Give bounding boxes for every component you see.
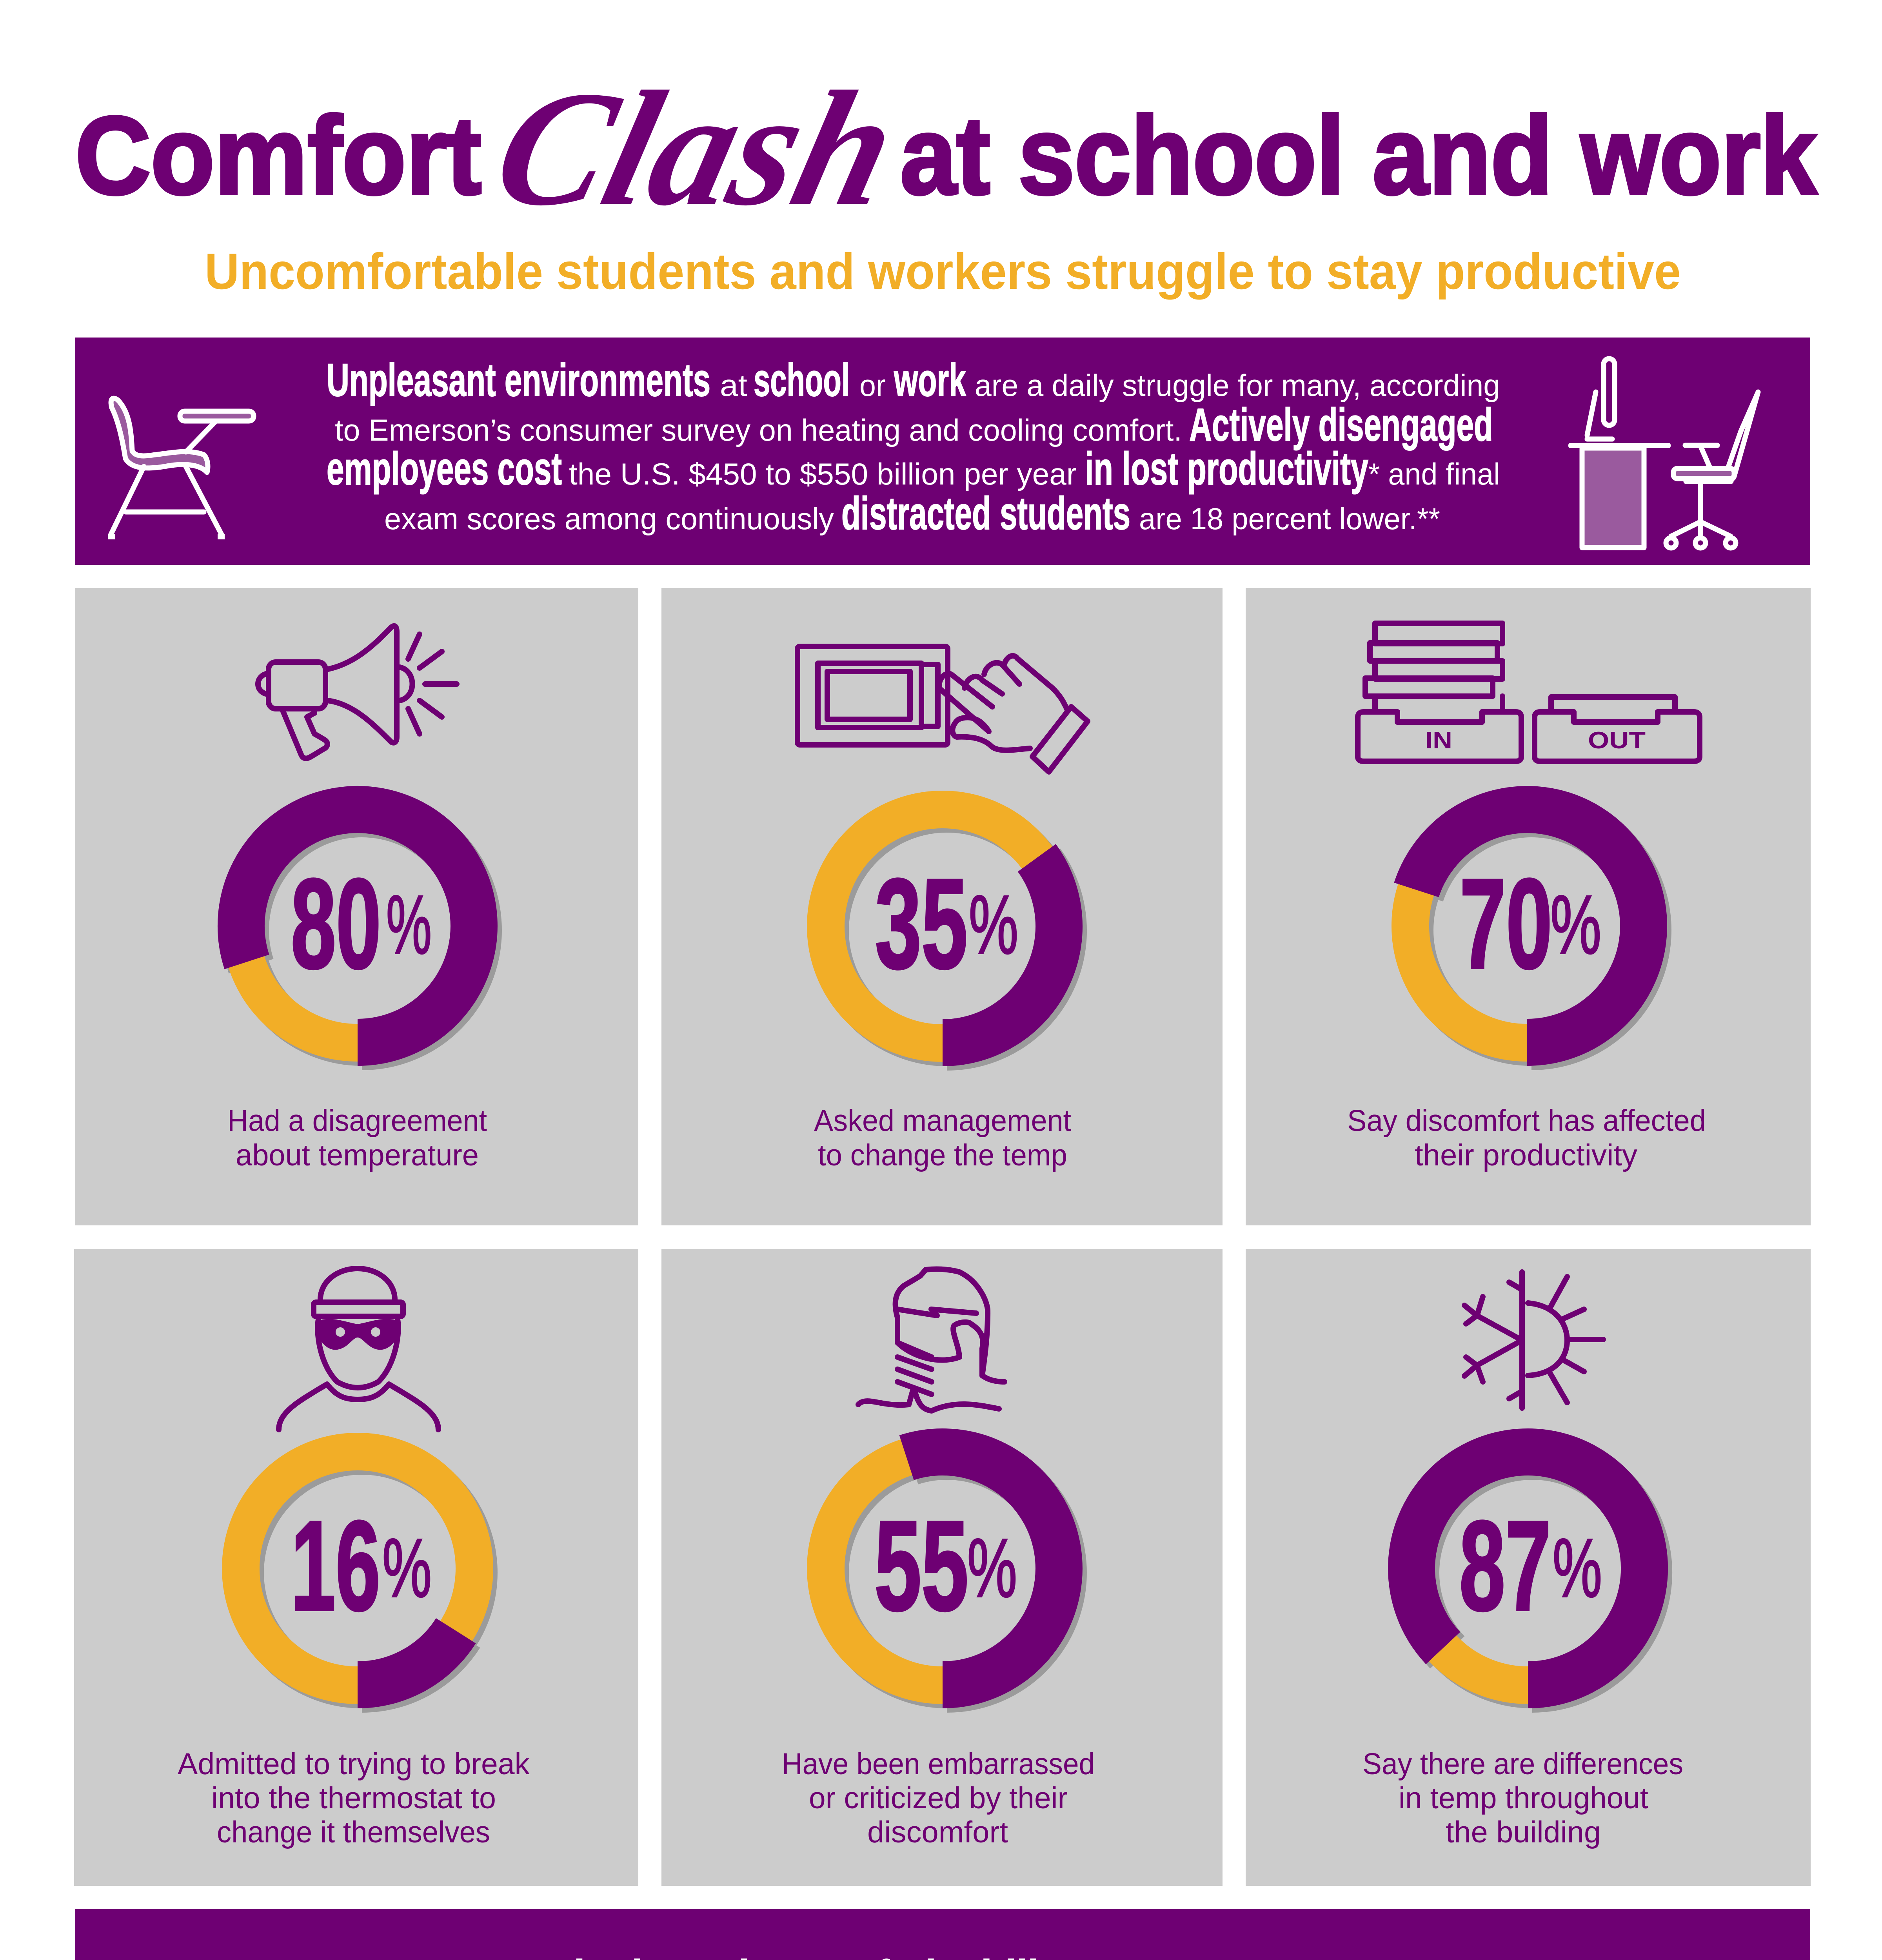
caption bbox=[227, 1104, 487, 1172]
caption: discomfort bbox=[867, 1815, 1008, 1849]
title bbox=[75, 58, 1818, 240]
caption: in temp throughout bbox=[1399, 1781, 1648, 1815]
caption bbox=[782, 1747, 1095, 1849]
caption: Admitted to trying to break bbox=[178, 1747, 530, 1781]
value: 55%: % bbox=[967, 1521, 1017, 1614]
intro text: in lost productivity bbox=[1085, 443, 1368, 495]
icon: office desk and chair bbox=[1568, 359, 1758, 548]
value: 80%: % bbox=[386, 878, 432, 971]
value: 80%: 80 bbox=[291, 853, 381, 995]
intro text: distracted students bbox=[841, 488, 1130, 539]
donut chart: 55% bbox=[826, 1452, 1064, 1690]
caption: into the thermostat to bbox=[211, 1781, 496, 1815]
tray labels: IN bbox=[1425, 727, 1452, 753]
intro text: * and final bbox=[1368, 457, 1500, 491]
panel: call to action banner bbox=[75, 1909, 1810, 1960]
icon: hand pressing thermostat bbox=[797, 646, 1088, 772]
caption: Asked management bbox=[814, 1104, 1071, 1138]
intro text: Unpleasant environments bbox=[327, 354, 710, 406]
caption: Have been embarrassed bbox=[782, 1747, 1095, 1781]
intro text: school bbox=[754, 354, 850, 406]
value: 87%: 87 bbox=[1459, 1495, 1551, 1637]
panel: 80 percent disagreement bbox=[75, 588, 638, 1225]
panel: intro banner bbox=[75, 338, 1810, 565]
panel: 87 percent temperature differences bbox=[1246, 1249, 1811, 1886]
title: Comfort bbox=[75, 94, 481, 217]
donut chart: 35% bbox=[826, 809, 1064, 1047]
tray labels: OUT bbox=[1588, 727, 1646, 753]
caption bbox=[178, 1747, 530, 1849]
intro text: at bbox=[720, 368, 747, 403]
tray labels bbox=[1425, 727, 1646, 753]
intro text: employees cost bbox=[327, 443, 562, 495]
caption: Say there are differences bbox=[1362, 1747, 1683, 1781]
caption: their productivity bbox=[1415, 1138, 1637, 1172]
icon: in and out trays bbox=[1358, 623, 1700, 761]
donut chart: 16% bbox=[241, 1452, 479, 1690]
panel: 16 percent thermostat break-in bbox=[74, 1249, 638, 1886]
intro text: are 18 percent lower.** bbox=[1139, 501, 1440, 536]
title: at school and work bbox=[900, 94, 1818, 217]
donut chart: 70% bbox=[1410, 809, 1648, 1047]
icon: school chair bbox=[108, 398, 254, 539]
caption: the building bbox=[1446, 1815, 1601, 1849]
panel: 70 percent productivity bbox=[1246, 588, 1811, 1225]
value: 35%: % bbox=[969, 878, 1018, 971]
icon: burglar bbox=[279, 1269, 438, 1430]
value: 70%: % bbox=[1550, 878, 1601, 971]
value: 70%: 70 bbox=[1460, 853, 1552, 995]
caption: Had a disagreement bbox=[227, 1104, 487, 1138]
title: Clash bbox=[479, 58, 913, 240]
intro text: to Emerson’s consumer survey on heating and cooling comfort. bbox=[335, 413, 1182, 447]
intro text: work bbox=[894, 354, 966, 406]
icon: megaphone bbox=[258, 626, 457, 759]
caption: change it themselves bbox=[217, 1815, 490, 1849]
caption: about temperature bbox=[236, 1138, 479, 1172]
donut chart: 87% bbox=[1411, 1452, 1649, 1690]
value: 87%: % bbox=[1553, 1521, 1602, 1614]
icon: half snowflake half sun bbox=[1464, 1272, 1603, 1408]
intro text: or bbox=[859, 368, 886, 403]
caption: Say discomfort has affected bbox=[1347, 1104, 1706, 1138]
subtitle: Uncomfortable students and workers struggle to stay productive bbox=[205, 243, 1681, 300]
value: 55%: 55 bbox=[874, 1495, 968, 1637]
caption bbox=[1347, 1104, 1706, 1172]
intro text: are a daily struggle for many, according bbox=[975, 368, 1500, 403]
caption bbox=[814, 1104, 1071, 1172]
icon: embarrassed face with hand bbox=[858, 1269, 1005, 1411]
intro text: exam scores among continuously bbox=[384, 501, 834, 536]
value: 35%: 35 bbox=[875, 853, 968, 995]
panel: 35 percent asked management bbox=[661, 588, 1223, 1225]
intro text: Actively disengaged bbox=[1189, 399, 1493, 451]
intro text: the U.S. $450 to $550 billion per year bbox=[569, 457, 1077, 491]
panel: 55 percent embarrassed bbox=[661, 1249, 1223, 1886]
caption bbox=[1362, 1747, 1683, 1849]
caption: to change the temp bbox=[818, 1138, 1067, 1172]
value: 16%: % bbox=[382, 1521, 432, 1614]
intro text bbox=[327, 354, 1500, 539]
caption: or criticized by their bbox=[809, 1781, 1068, 1815]
donut chart: 80% bbox=[241, 809, 479, 1047]
value: 16%: 16 bbox=[291, 1495, 380, 1637]
